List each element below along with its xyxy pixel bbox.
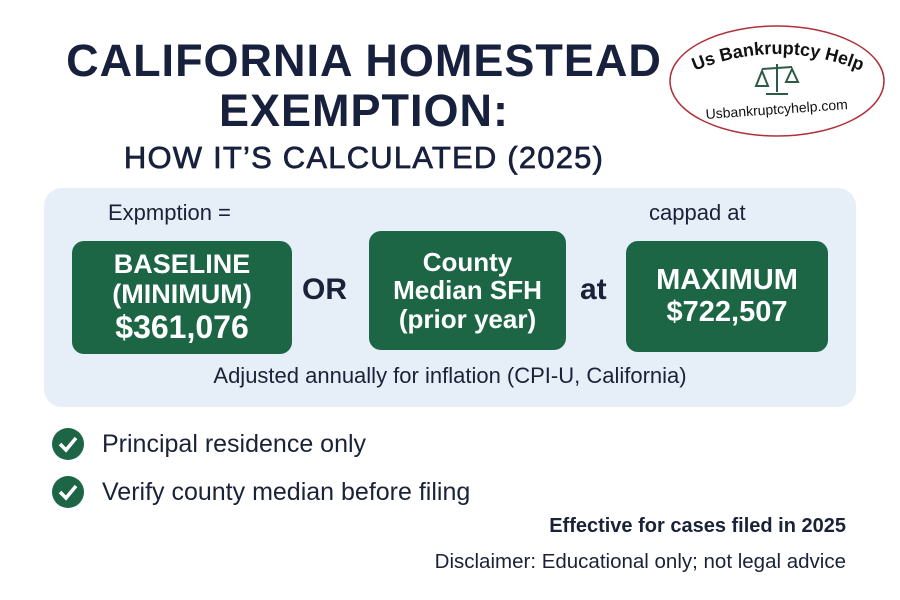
- checklist: [52, 428, 470, 508]
- box: county median: County: [423, 247, 512, 277]
- title: CALIFORNIA HOMESTEAD: [66, 35, 662, 86]
- box: county median: (prior year): [399, 304, 536, 334]
- box: maximum: MAXIMUM: [656, 264, 798, 296]
- logo: [669, 25, 885, 137]
- text: OR: OR: [302, 273, 347, 306]
- label: exemption: Expmption =: [108, 200, 231, 225]
- title: EXEMPTION:: [219, 85, 509, 136]
- box: baseline: $361,076: [115, 309, 249, 345]
- logo: Us Bankruptcy Help: [691, 42, 863, 72]
- title: HOW IT’S CALCULATED (2025): [124, 140, 604, 175]
- box: county median: [369, 231, 566, 350]
- box: maximum: $722,507: [667, 296, 787, 328]
- note: inflation: Adjusted annually for inflation (CPI-U, California): [213, 363, 687, 388]
- footer: disclaimer: Disclaimer: Educational only; not legal advice: [435, 550, 846, 573]
- item 2: Verify county median before filing: [102, 478, 470, 506]
- box: county median: Median SFH: [393, 275, 542, 305]
- box: baseline: [72, 241, 292, 354]
- box: baseline: (MINIMUM): [112, 279, 252, 309]
- title: [66, 35, 662, 175]
- label: capped at: cappad at: [649, 200, 746, 225]
- text: at: at: [580, 273, 607, 306]
- footer: effective: Effective for cases filed in 2025: [549, 515, 846, 537]
- box: maximum: [626, 241, 828, 352]
- panel: formula: [44, 188, 856, 407]
- logo: Usbankruptcyhelp.com: [705, 96, 848, 122]
- item 1: Principal residence only: [102, 430, 366, 458]
- box: baseline: BASELINE: [114, 249, 250, 279]
